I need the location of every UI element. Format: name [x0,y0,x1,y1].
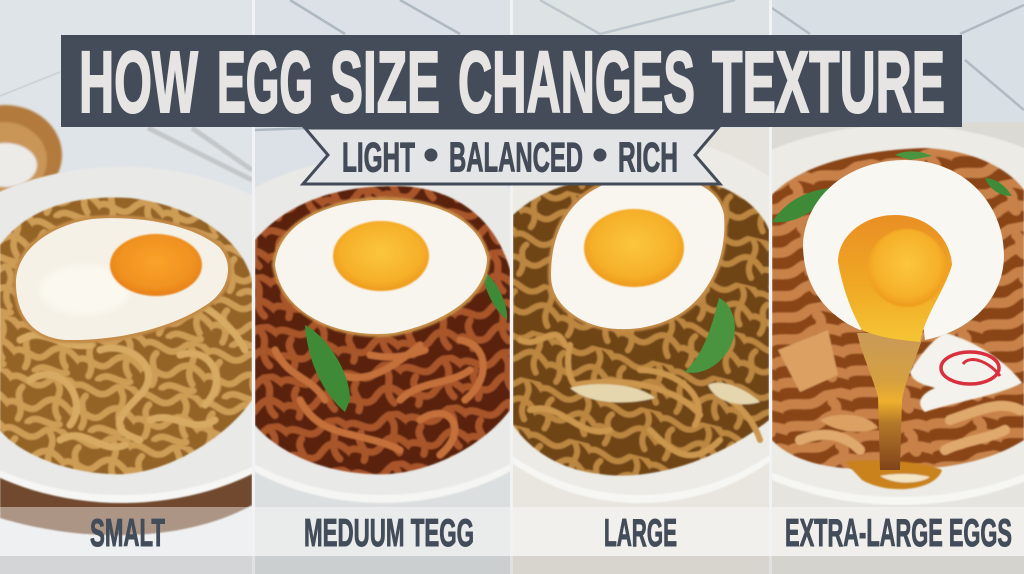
leaf [772,188,830,222]
label band: medium: MEDUUM TEGG [304,512,474,555]
floor shadow strip [0,556,1024,574]
fried egg [272,197,490,337]
yolk drip [857,333,924,470]
yolk [110,234,202,296]
leaf [685,298,735,373]
noodles [513,175,769,476]
panel: large egg [513,0,769,574]
gutter lines [252,0,772,574]
wooden board [0,473,252,536]
title banner: HOW [79,34,198,131]
ribbon subtitle: RICH [618,134,678,180]
label band: small: SMALT [90,512,165,555]
ribbon subtitle: BALANCED [449,134,583,180]
panel: extra-large egg [772,0,1024,574]
kamaboko fish cake [910,333,1022,412]
plate [0,168,252,504]
runny yolk [838,215,952,342]
label band: small [0,507,252,556]
plate [255,164,510,504]
yolk [584,209,684,287]
panel: medium egg [255,0,510,574]
salt bowl [0,105,62,205]
sauce pool [845,460,942,489]
title banner: CHANGES [458,34,695,131]
ribbon subtitle: • [424,131,438,178]
noodles [255,186,510,474]
egg [803,160,1004,342]
yolk [333,221,429,291]
label band: large: LARGE [604,512,677,555]
plate [772,127,1024,505]
panel: small egg [0,0,252,536]
leaf left [305,325,350,412]
ribbon subtitle: LIGHT [342,134,415,180]
label band: medium [255,507,510,556]
title banner [61,34,962,131]
fried egg [13,215,232,343]
noodles [772,148,1024,469]
leaf top right [985,178,1012,196]
fried egg [548,174,727,332]
chopsticks [148,128,252,180]
plate [513,147,769,503]
title banner: SIZE [330,34,440,131]
yolk core [868,229,946,307]
ribbon subtitle: • [593,131,607,178]
leaf right [484,273,507,320]
label band: large [513,507,769,556]
ribbon subtitle [303,128,720,184]
title banner: EGG [217,34,313,131]
leaf top [895,151,932,160]
noodles [0,198,252,474]
